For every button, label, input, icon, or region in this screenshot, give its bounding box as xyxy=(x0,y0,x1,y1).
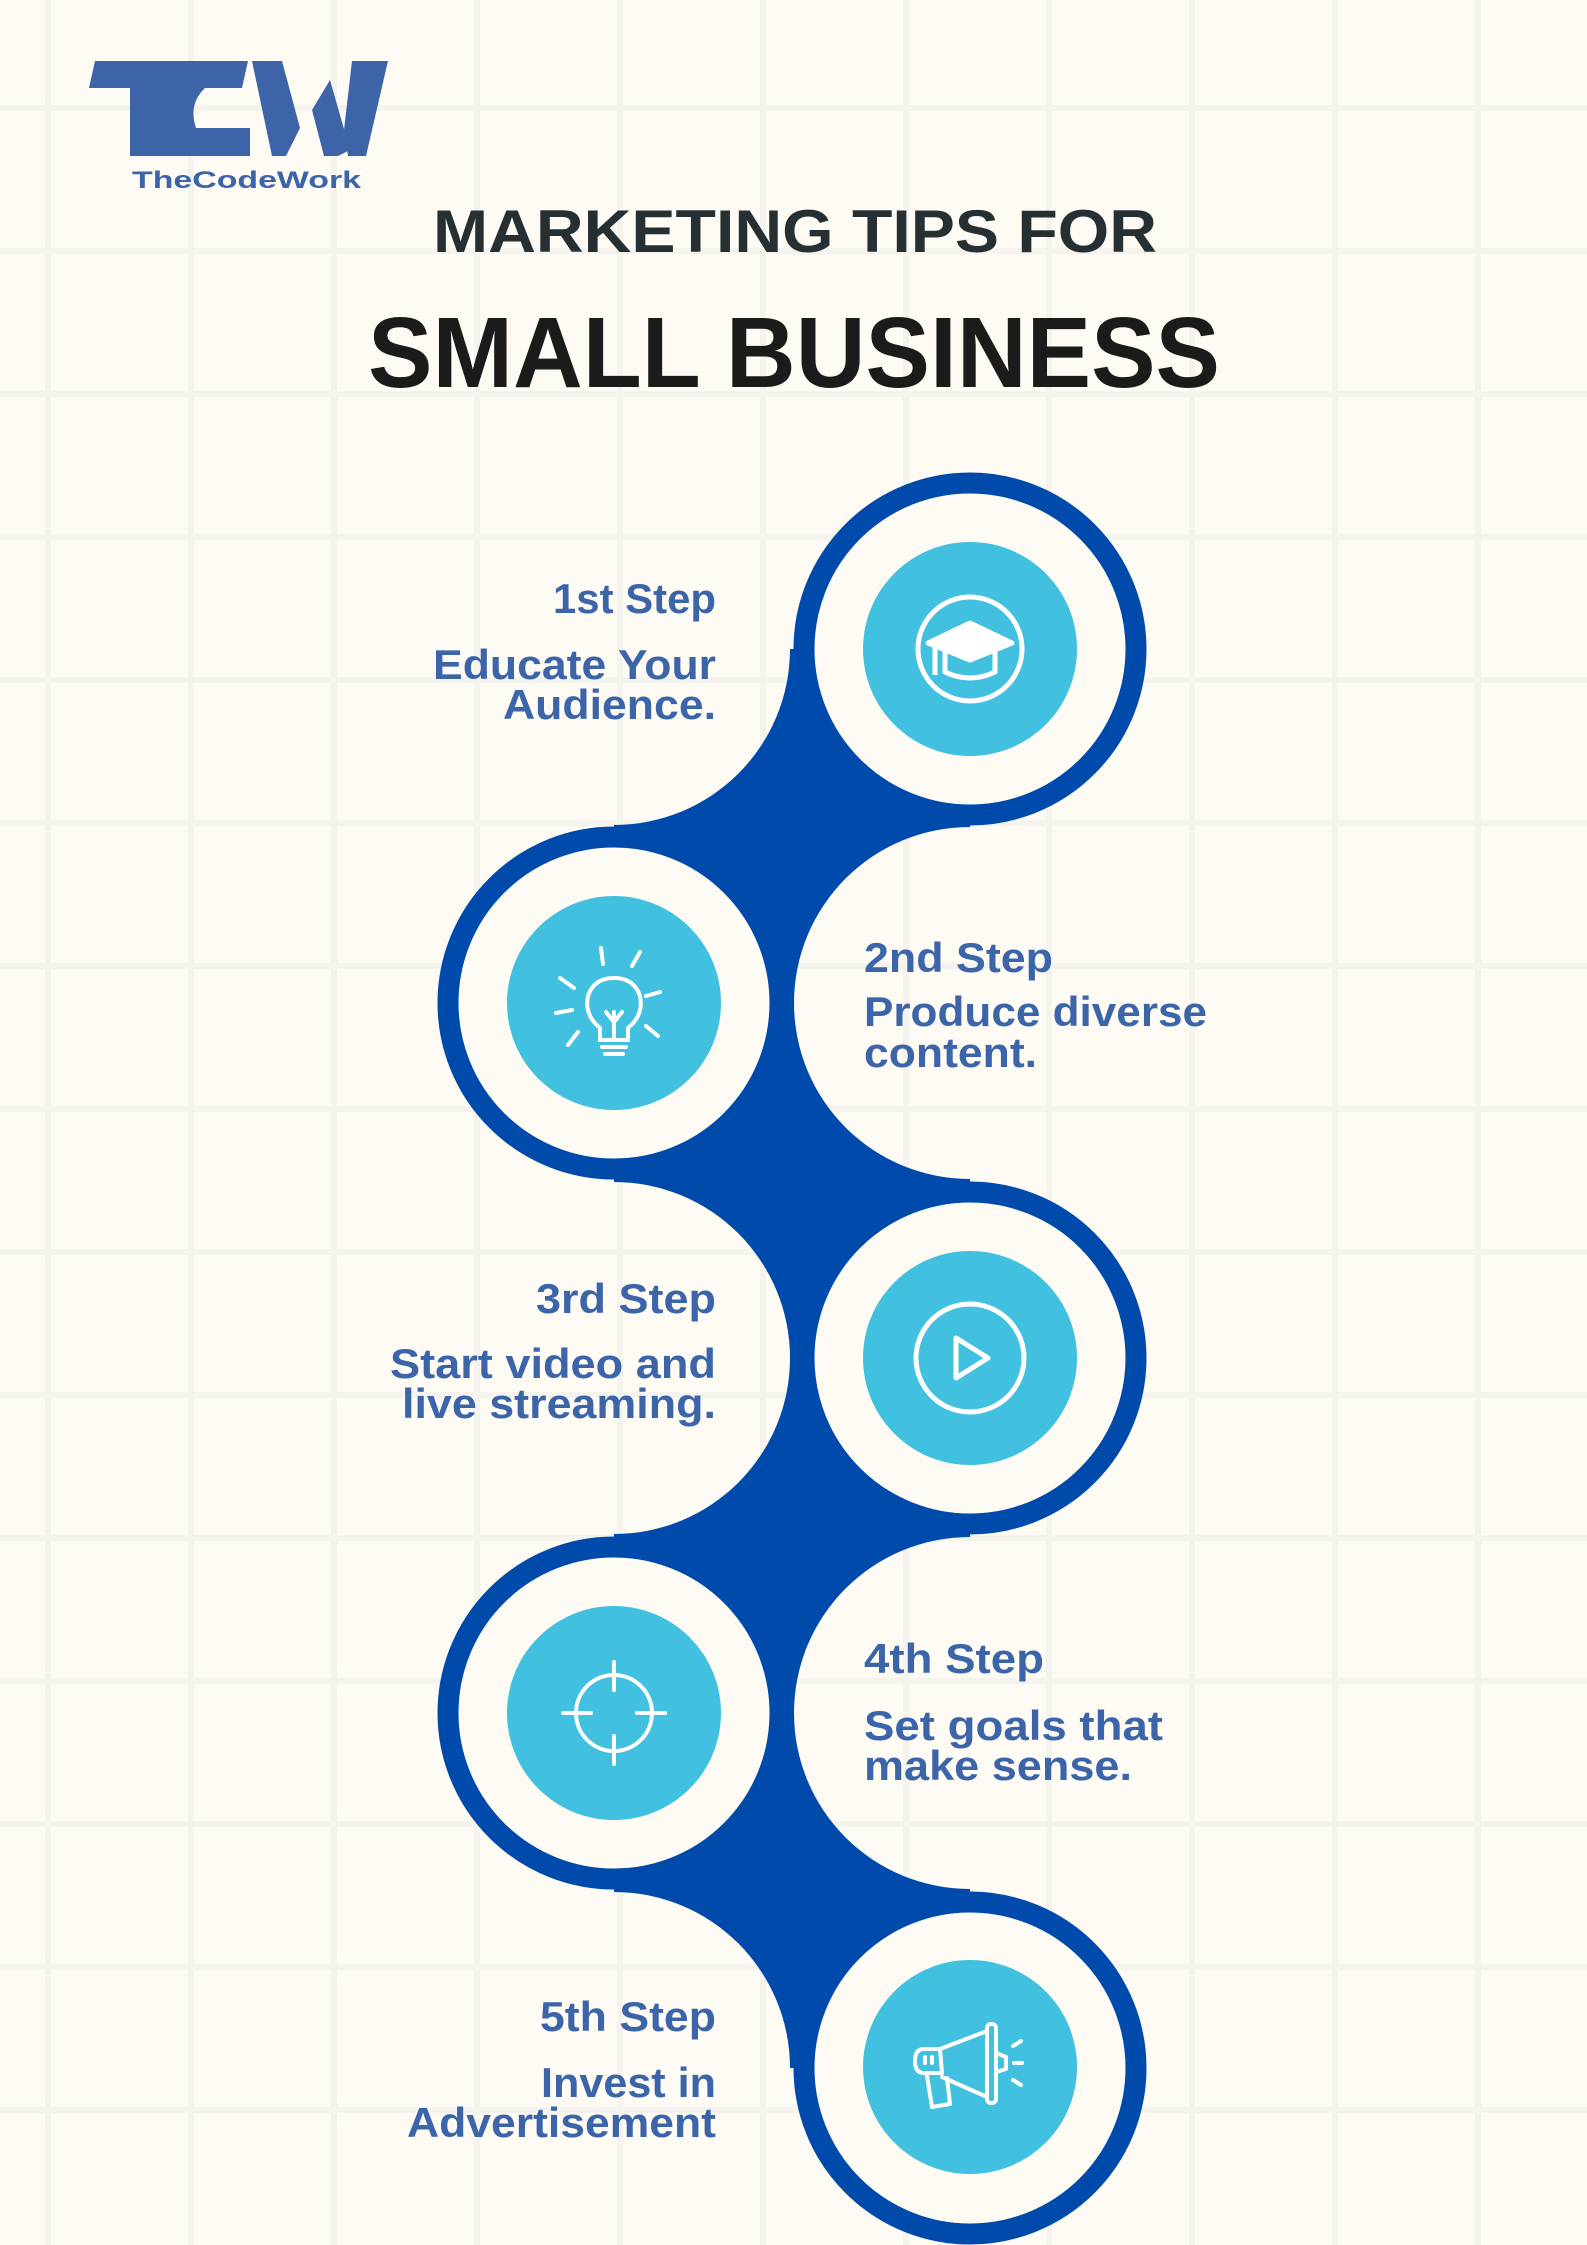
step 2 text: content. xyxy=(864,1029,1037,1076)
step 3 text xyxy=(390,1275,716,1427)
step 5 text: Invest in xyxy=(541,2059,716,2106)
step 2 text: Produce diverse xyxy=(864,988,1207,1035)
logo xyxy=(89,61,388,194)
step 4 text: Set goals that xyxy=(864,1702,1163,1749)
logo: TheCodeWork xyxy=(132,167,362,194)
step 3 text: live streaming. xyxy=(402,1380,716,1427)
step 1 text xyxy=(433,575,716,728)
step 4 text xyxy=(864,1635,1163,1789)
step 5 text: Advertisement xyxy=(407,2099,716,2146)
step 5 text xyxy=(407,1993,716,2146)
title: SMALL BUSINESS xyxy=(368,297,1220,409)
title: MARKETING TIPS FOR xyxy=(433,198,1157,265)
icon: graduation cap xyxy=(918,597,1022,701)
step 4 text: make sense. xyxy=(864,1742,1132,1789)
icon: play button xyxy=(916,1304,1024,1412)
step 5 text: 5th Step xyxy=(540,1993,716,2040)
step circles xyxy=(448,483,1136,2234)
step 3 text: 3rd Step xyxy=(536,1275,716,1322)
step 3 text: Start video and xyxy=(390,1340,716,1387)
step 2 text: 2nd Step xyxy=(864,934,1053,981)
icon: megaphone xyxy=(915,2024,1022,2107)
title xyxy=(368,198,1220,409)
step 4 text: 4th Step xyxy=(864,1635,1044,1682)
connector path xyxy=(614,649,970,2068)
icon: target crosshair xyxy=(563,1662,665,1764)
step 1 text: Audience. xyxy=(503,681,716,728)
step 1 text: Educate Your xyxy=(433,641,716,688)
icon: light bulb xyxy=(556,948,660,1054)
step 2 text xyxy=(864,934,1207,1076)
step 1 text: 1st Step xyxy=(553,575,716,622)
